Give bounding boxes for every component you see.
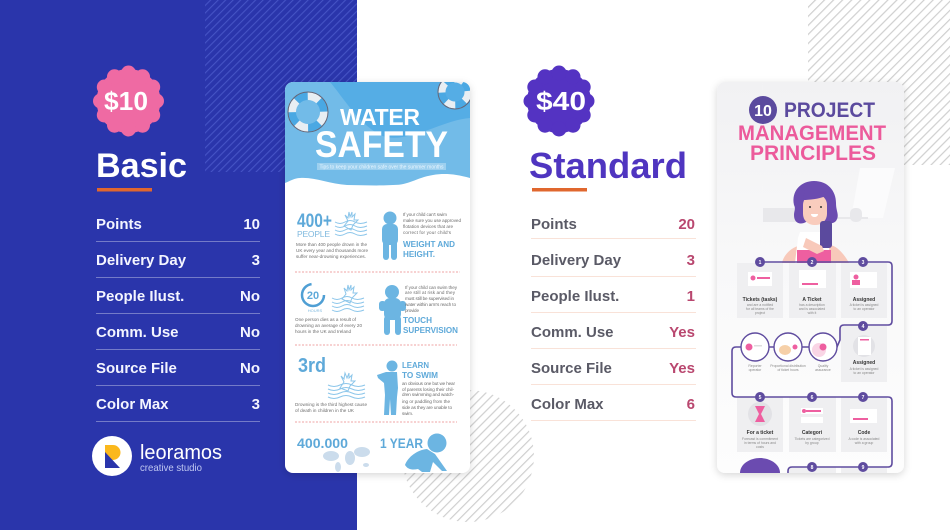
step numbers: 5: [759, 395, 762, 401]
text: learn to swim: dren swimming and watch-: [402, 392, 454, 397]
row: Color Max: [531, 396, 696, 421]
card: A Ticket: has a description: [799, 303, 825, 307]
heading: Standard: Standard: [529, 145, 687, 186]
row: Source File: [531, 360, 696, 385]
row: Comm. Use: No: [240, 324, 260, 341]
card: A Ticket: and is associated: [799, 307, 825, 311]
icon: life ring right: [438, 82, 470, 110]
icon: life ring left: [288, 92, 328, 132]
card: Categori: [795, 408, 830, 445]
section: 3rd: Drowning is the third highest cause: [295, 402, 367, 407]
card: Assigned second: Assigned: [853, 360, 875, 366]
divider: [295, 271, 460, 273]
row: Points: Points: [531, 216, 577, 233]
step numbers: 9: [862, 465, 865, 471]
section: every 20 hours: hours in the UK and Ireland: [295, 329, 351, 334]
row: Points: 10: [243, 216, 260, 233]
stat: 1 year with baby: [380, 434, 447, 472]
row: People Ilust.: No: [240, 288, 260, 305]
card: For a ticket: costs: [756, 445, 764, 449]
row: Color Max: 6: [687, 396, 695, 413]
section: 400+ people: [296, 211, 368, 259]
card: Code: Code: [858, 430, 870, 436]
section: 400+ people: UK every year and thousands more: [296, 248, 368, 253]
title: WATER SAFETY: WATER: [340, 104, 420, 130]
row: Source File: Yes: [669, 360, 695, 377]
step numbers: 1: [759, 260, 762, 266]
title: 10 Project Management Principles: MANAGEMENT: [738, 122, 886, 145]
circle: proportional distribution: [770, 333, 806, 372]
text: touch supervision: water within arm's reach to: [405, 302, 456, 307]
stripe pattern circle: [402, 390, 534, 522]
row: Comm. Use: [96, 324, 260, 350]
text: learn to swim: [402, 361, 455, 416]
stat: 400.000 with world map: [297, 435, 370, 472]
text: learn to swim: an obvious one but we hear: [402, 381, 455, 386]
card: Assigned: A ticket is assigned: [850, 303, 879, 307]
row: People Ilust.: 1: [687, 288, 695, 305]
card: Categori: Categori: [802, 430, 823, 436]
tagline: Tips to keep your children safe over the summer months: [320, 164, 444, 170]
row: Delivery Day: 3: [252, 252, 260, 269]
row: Color Max: [96, 396, 260, 422]
step numbers: 3: [862, 260, 865, 266]
stripe pattern on blue panel: [205, 0, 357, 172]
text: weight and height: WEIGHT AND: [403, 240, 455, 249]
circle: quality assurance: [809, 333, 837, 372]
badge: $40 price: [524, 66, 594, 136]
text: weight and height: HEIGHT.: [403, 250, 435, 259]
text: touch supervision: are still at risk and they: [405, 290, 456, 295]
stripe pattern top right: [808, 0, 950, 165]
connector path lower: [732, 347, 892, 480]
section: 3rd: of death in children in the UK: [295, 408, 355, 413]
card: Categori: Tickets are categorized: [795, 437, 830, 441]
row: Source File: No: [240, 360, 260, 377]
section: every 20 hours: drowning an average of every 20: [295, 323, 362, 328]
figure: child with armbands: [379, 285, 406, 335]
row: Source File: [96, 360, 260, 386]
stat: 1 year with baby: 1 YEAR: [380, 435, 423, 451]
text: learn to swim: side as they are unable to: [402, 405, 452, 410]
circle: reporter operator: Reporter: [748, 364, 762, 368]
title: 10 Project Management Principles: PRINCIPLES: [750, 142, 876, 165]
circle: quality assurance: Quality: [818, 364, 829, 368]
card: Assigned second: A ticket is assigned: [850, 367, 879, 371]
section: 400+ people: suffer near-drowning experiences.: [296, 254, 366, 259]
process cards: [737, 263, 887, 473]
step numbers: 4: [862, 324, 865, 330]
step numbers: 7: [862, 395, 865, 401]
section: 3rd: 3rd: [298, 355, 326, 377]
section: 3rd: [295, 355, 367, 413]
circle: quality assurance: assurance: [815, 368, 831, 372]
card: Tickets (tasks): and are a notified: [747, 303, 773, 307]
hair of second figure: [740, 458, 780, 473]
text: touch supervision: If your child can swim they: [405, 285, 458, 290]
row: Delivery Day: Delivery Day: [96, 252, 187, 269]
row: Points: 20: [678, 216, 695, 233]
logo: leoramos: leoramos: [140, 442, 222, 464]
section: 400+ people: PEOPLE: [297, 229, 330, 239]
badge: $40 price: $40: [536, 86, 586, 116]
title: 10 Project Management Principles: 10: [754, 103, 772, 120]
heading underline: [97, 188, 152, 192]
card: Tickets (tasks): [743, 272, 778, 315]
card: Assigned: to an operator: [853, 307, 875, 311]
row: Delivery Day: [531, 252, 696, 277]
panel: project management infographic: [717, 82, 904, 480]
badge: $10 price: [93, 66, 164, 136]
text: touch supervision: TOUCH: [403, 316, 432, 325]
circle: reporter operator: operator: [749, 368, 762, 372]
connector path: [764, 261, 893, 348]
title: 10 Project Management Principles: [738, 96, 886, 165]
row: Color Max: Color Max: [531, 396, 604, 413]
section: 400+ people: More than 400 people drown in the: [296, 242, 367, 247]
header background: [285, 82, 470, 185]
text: touch supervision: [403, 285, 458, 335]
text: touch supervision: provide: [405, 308, 419, 313]
title: WATER SAFETY: [315, 104, 448, 165]
card: Code: A code is associated: [849, 437, 880, 441]
heading underline: [532, 188, 587, 192]
row: Color Max: Color Max: [96, 396, 169, 413]
row: Delivery Day: [96, 252, 260, 278]
row: Comm. Use: [531, 324, 696, 349]
card: Tickets (tasks): Tickets (tasks): [743, 297, 778, 303]
text: learn to swim: LEARN: [402, 361, 429, 370]
card: Code: [849, 409, 880, 445]
card: A Ticket: [799, 270, 826, 315]
card: Assigned: Assigned: [853, 297, 875, 303]
row: Color Max: 3: [252, 396, 260, 413]
section: every 20 hours: [295, 284, 364, 334]
row: People Ilust.: [531, 288, 696, 313]
row: Points: [96, 216, 260, 242]
card: Tickets (tasks): project: [755, 311, 765, 315]
text: learn to swim: ing or paddling from the: [402, 399, 450, 404]
figure: child with float vest: [382, 212, 398, 260]
illustration: woman with phone: [782, 181, 849, 263]
divider: [295, 344, 457, 346]
row: Comm. Use: Comm. Use: [531, 324, 614, 341]
title: 10 Project Management Principles: PROJECT: [784, 99, 875, 122]
row: Source File: Source File: [96, 360, 177, 377]
circle: proportional distribution: Proportional distribution: [770, 364, 806, 368]
card: Categori: by group: [805, 441, 819, 445]
stat: 400.000 with world map: 400.000: [297, 435, 348, 451]
text: touch supervision: SUPERVISION: [403, 326, 458, 335]
text: touch supervision: must still be supervised in: [405, 296, 454, 301]
row: Comm. Use: Comm. Use: [96, 324, 179, 341]
card: For a ticket: in terms of hours and: [744, 441, 776, 445]
card: Tickets (tasks): for all teams of the: [746, 307, 774, 311]
step numbers: [755, 257, 868, 472]
card: Code: with a group: [855, 441, 873, 445]
step numbers: 2: [811, 260, 814, 266]
icon: hand in waves: [335, 212, 367, 236]
icon: hand in waves: [328, 373, 365, 398]
text: weight and height: If your child can't swim: [403, 212, 447, 217]
step numbers: 8: [811, 465, 814, 471]
text: weight and height: make sure you use approved: [403, 218, 461, 223]
card: For a ticket: Forecast is commitment: [742, 437, 778, 441]
step numbers: 6: [811, 395, 814, 401]
icon: 20 hours clock: 20: [307, 290, 319, 302]
row: People Ilust.: [96, 288, 260, 314]
section: 400+ people: 400+: [297, 211, 332, 232]
card: For a ticket: [742, 402, 778, 449]
row: Delivery Day: Delivery Day: [531, 252, 622, 269]
card: Assigned: [850, 272, 879, 311]
heading: Basic: Basic: [96, 147, 187, 185]
icon: hand in waves: [332, 285, 364, 312]
text: weight and height: correct for your child's: [403, 230, 452, 235]
row: Points: [531, 216, 696, 239]
row: Source File: Source File: [531, 360, 612, 377]
circle: proportional distribution: of ticket hours: [777, 368, 799, 372]
background sheet shapes: [851, 168, 895, 218]
title: WATER SAFETY: SAFETY: [315, 124, 448, 165]
text: learn to swim: of parents losing their chil-: [402, 387, 454, 392]
row: Delivery Day: 3: [687, 252, 695, 269]
icon: 20 hours clock: [302, 284, 324, 313]
panel: basic plan: [92, 66, 260, 476]
icon: 20 hours clock: HOURS: [308, 308, 323, 313]
divider: [295, 421, 457, 423]
figure: child standing: [377, 360, 398, 415]
row: Comm. Use: Yes: [669, 324, 695, 341]
logo: leoramos: creative studio: [140, 462, 202, 474]
panel: basic plan background: [0, 0, 357, 530]
text: learn to swim: TO SWIM: [402, 371, 438, 380]
row: Points: Points: [96, 216, 142, 233]
text: learn to swim: swim.: [402, 411, 413, 416]
logo: leoramos: [92, 436, 222, 476]
card: For a ticket: For a ticket: [747, 430, 774, 436]
card: Assigned second: [850, 335, 879, 375]
card: A Ticket: A Ticket: [802, 297, 822, 303]
badge: $10 price: $10: [104, 86, 148, 116]
text: weight and height: flotation devices that are: [403, 224, 453, 229]
circle: reporter operator: [741, 333, 769, 372]
header accent: [330, 82, 470, 138]
card: Assigned second: to an operator: [853, 371, 875, 375]
text: weight and height: [403, 212, 461, 259]
panel: standard plan: [524, 66, 696, 421]
step circles: [741, 333, 837, 372]
section: every 20 hours: One person dies as a result of: [295, 317, 357, 322]
panel: water safety infographic: [285, 75, 472, 473]
row: People Ilust.: People Ilust.: [531, 288, 619, 305]
card: A Ticket: with it: [808, 311, 816, 315]
row: People Ilust.: People Ilust.: [96, 288, 184, 305]
